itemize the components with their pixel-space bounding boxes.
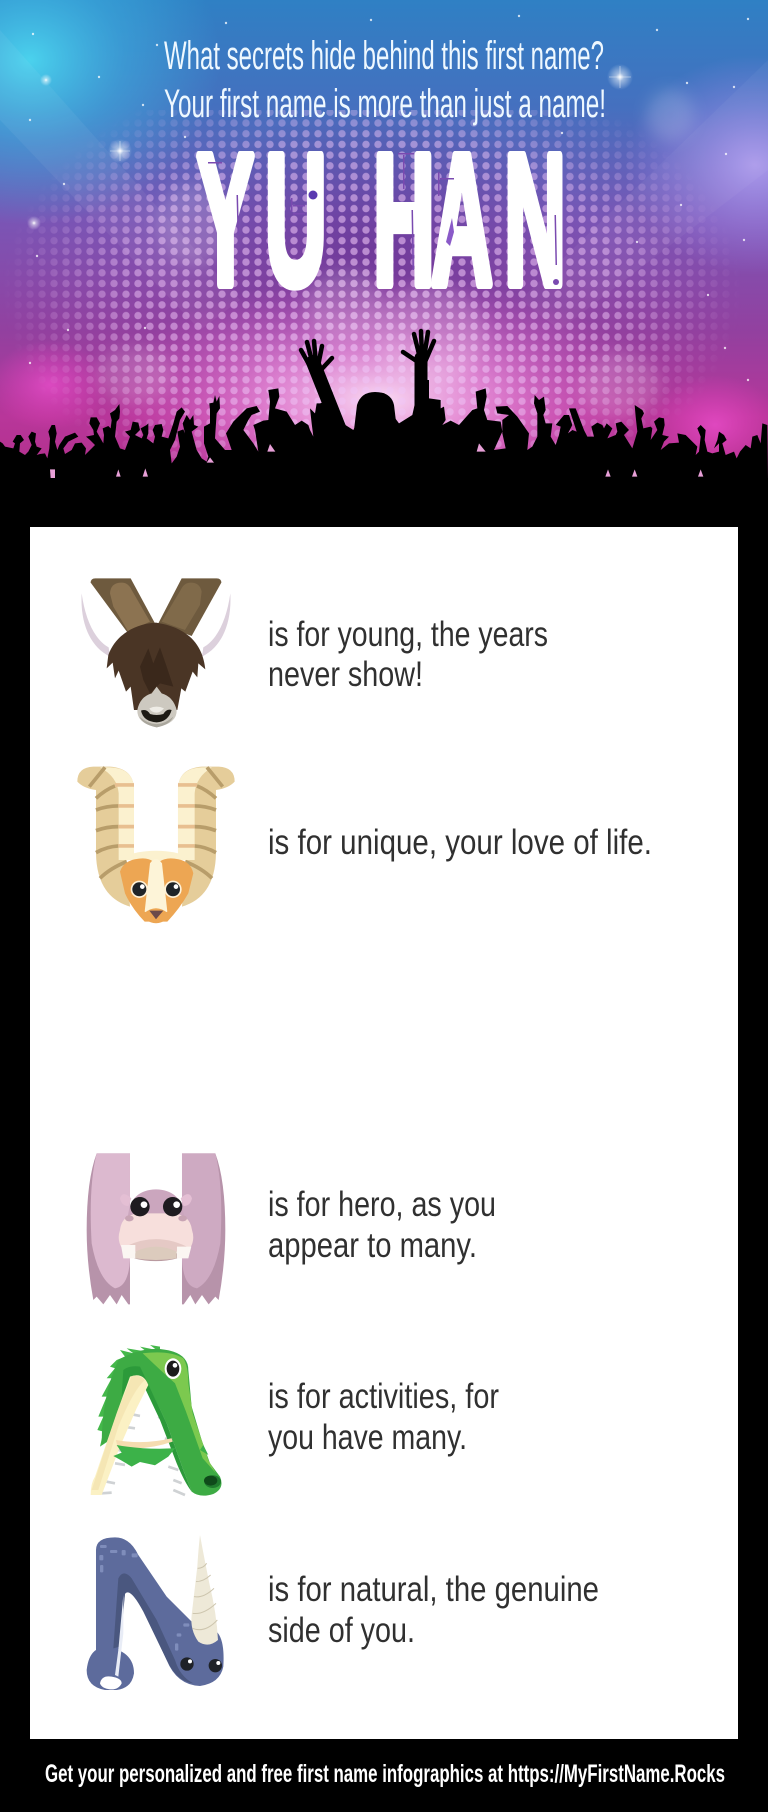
row: H is for hero: [87, 1153, 496, 1304]
text: natural: is for natural, the genuine: [268, 1570, 599, 1609]
text: young: [268, 615, 548, 694]
icon: bighorn letter U: [77, 767, 235, 923]
solid black below crowd: [0, 478, 768, 528]
central figure head: [354, 392, 397, 430]
icon: narwhal letter N: [87, 1535, 224, 1690]
row: U is for unique: [77, 767, 652, 923]
central raised arms: [301, 331, 434, 436]
text: activities: is for activities, for: [268, 1377, 499, 1416]
icon: hippo letter H: [87, 1153, 225, 1304]
text: young: never show!: [268, 655, 423, 694]
text: hero: appear to many.: [268, 1226, 477, 1265]
crowd silhouette: [0, 331, 768, 528]
row: N is for natural: [87, 1535, 599, 1690]
text: natural: side of you.: [268, 1611, 415, 1650]
text: natural: [268, 1570, 599, 1650]
panel: white card: [30, 527, 738, 1739]
icon: crocodile letter A: [91, 1345, 221, 1496]
crowd right half: [384, 380, 768, 480]
header: concert stage background: [0, 0, 768, 525]
crowd left half: [0, 388, 384, 480]
title: name: YU HAN: [197, 116, 566, 324]
text: unique: is for unique, your love of life.: [268, 823, 652, 862]
row: Y is for young: [81, 578, 548, 727]
text: young: is for young, the years: [268, 615, 548, 654]
icon: yak letter Y: [81, 578, 230, 727]
text: activities: [268, 1377, 499, 1457]
text: hero: is for hero, as you: [268, 1185, 496, 1224]
text: activities: you have many.: [268, 1418, 467, 1457]
sparkle stars: [27, 15, 749, 381]
row: A is for activities: [91, 1345, 499, 1496]
heading: tagline: [164, 34, 606, 126]
text: hero: [268, 1185, 496, 1265]
